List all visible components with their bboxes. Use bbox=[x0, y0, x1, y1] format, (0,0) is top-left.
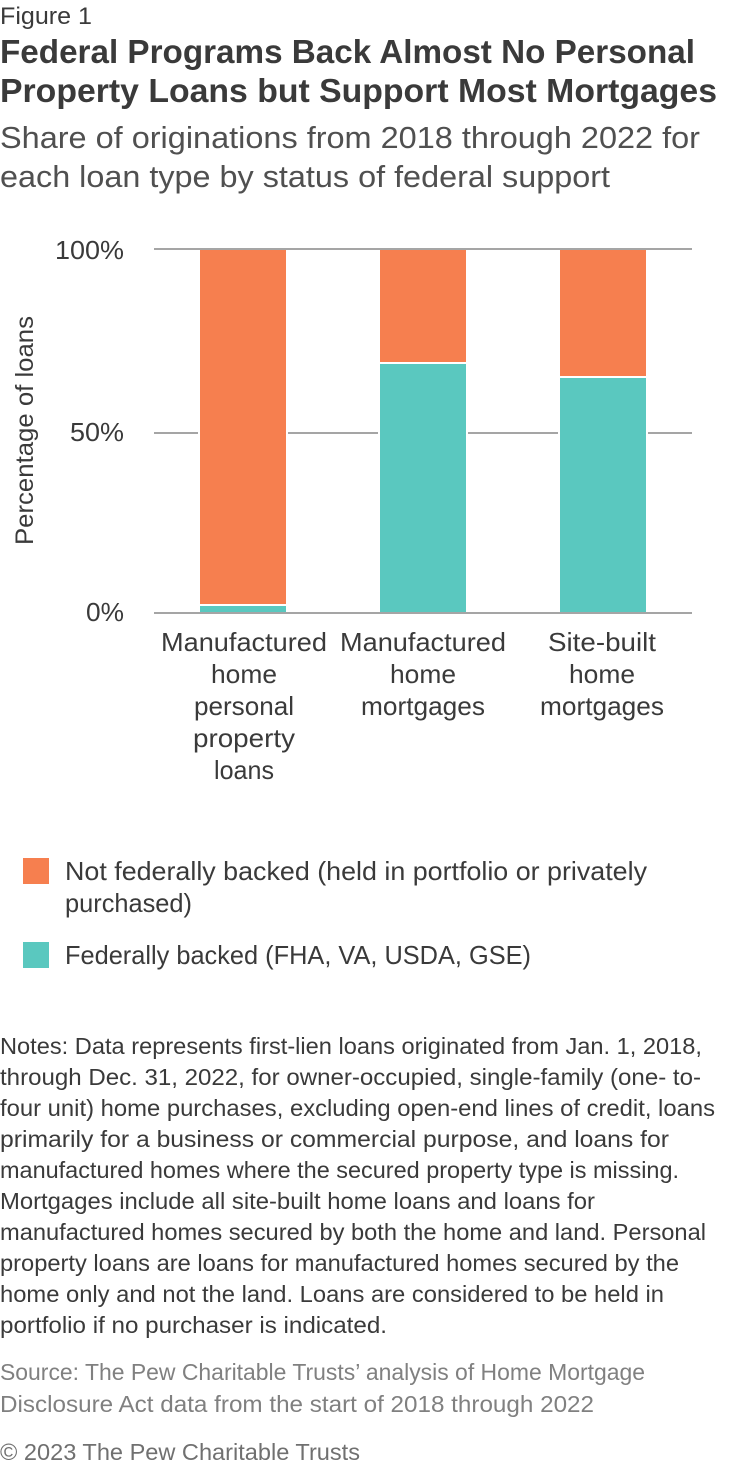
category label: manufactured home mortgages: mortgages bbox=[361, 691, 485, 721]
category label: manufactured home personal property loans: loans bbox=[214, 755, 274, 785]
legend item: not federally backed bbox=[23, 856, 647, 918]
y axis tick labels: 0% bbox=[86, 597, 124, 627]
category label: manufactured home personal property loans: property bbox=[193, 723, 295, 753]
y axis tick labels: 100% bbox=[55, 235, 124, 265]
y axis tick labels bbox=[55, 235, 124, 627]
category label: site-built home mortgages: mortgages bbox=[540, 691, 664, 721]
legend item: federally backed: Federally backed (FHA, VA, USDA, GSE) bbox=[65, 940, 531, 970]
category label: manufactured home personal property loans bbox=[161, 627, 327, 785]
bar: manufactured home personal property loans bbox=[198, 250, 288, 612]
legend item: not federally backed: Not federally backed (held in portfolio or privately bbox=[65, 856, 647, 886]
subtitle: each loan type by status of federal support bbox=[0, 159, 610, 194]
gridlines bbox=[154, 249, 692, 613]
notes: Mortgages include all site-built home loans and loans for bbox=[0, 1188, 595, 1214]
category label: manufactured home mortgages bbox=[340, 627, 506, 721]
legend item: not federally backed: purchased) bbox=[65, 888, 192, 918]
notes: Notes: Data represents first-lien loans originated from Jan. 1, 2018, bbox=[0, 1033, 702, 1059]
stacked bar chart bbox=[11, 235, 692, 785]
category label: manufactured home personal property loans: personal bbox=[194, 691, 294, 721]
notes bbox=[0, 1033, 715, 1338]
category label: manufactured home personal property loans: home bbox=[211, 659, 277, 689]
notes: property loans are loans for manufactured homes secured by the bbox=[0, 1250, 679, 1276]
title: Federal Programs Back Almost No Personal bbox=[0, 33, 695, 70]
notes: manufactured homes secured by both the home and land. Personal bbox=[0, 1219, 706, 1245]
category label: manufactured home mortgages: home bbox=[390, 659, 456, 689]
category label: manufactured home personal property loans: Manufactured bbox=[161, 627, 327, 657]
category label: site-built home mortgages: Site-built bbox=[548, 627, 657, 657]
category label: site-built home mortgages: home bbox=[569, 659, 635, 689]
bar: manufactured home mortgages bbox=[378, 250, 468, 612]
notes: four unit) home purchases, excluding open-end lines of credit, loans bbox=[0, 1095, 715, 1121]
category label: site-built home mortgages bbox=[540, 627, 664, 721]
subtitle: Share of originations from 2018 through 2022 for bbox=[0, 120, 700, 155]
source: Disclosure Act data from the start of 2018 through 2022 bbox=[0, 1391, 594, 1417]
y axis title: Percentage of loans bbox=[11, 316, 39, 545]
source: Source: The Pew Charitable Trusts’ analysis of Home Mortgage bbox=[0, 1359, 645, 1385]
notes: through Dec. 31, 2022, for owner-occupied, single-family (one- to- bbox=[0, 1064, 701, 1090]
notes: portfolio if no purchaser is indicated. bbox=[0, 1312, 387, 1338]
bar: site-built home mortgages bbox=[558, 250, 648, 612]
y axis tick labels: 50% bbox=[70, 417, 124, 447]
title bbox=[0, 33, 717, 109]
title: Property Loans but Support Most Mortgages bbox=[0, 72, 717, 109]
copyright: © 2023 The Pew Charitable Trusts bbox=[0, 1439, 360, 1465]
category label: manufactured home mortgages: Manufactured bbox=[340, 627, 506, 657]
notes: manufactured homes where the secured property type is missing. bbox=[0, 1157, 679, 1183]
legend bbox=[23, 856, 647, 970]
figure label: Figure 1 bbox=[0, 3, 92, 30]
subtitle bbox=[0, 120, 700, 194]
source bbox=[0, 1359, 645, 1417]
notes: primarily for a business or commercial purpose, and loans for bbox=[0, 1126, 669, 1152]
notes: home only and not the land. Loans are considered to be held in bbox=[0, 1281, 664, 1307]
